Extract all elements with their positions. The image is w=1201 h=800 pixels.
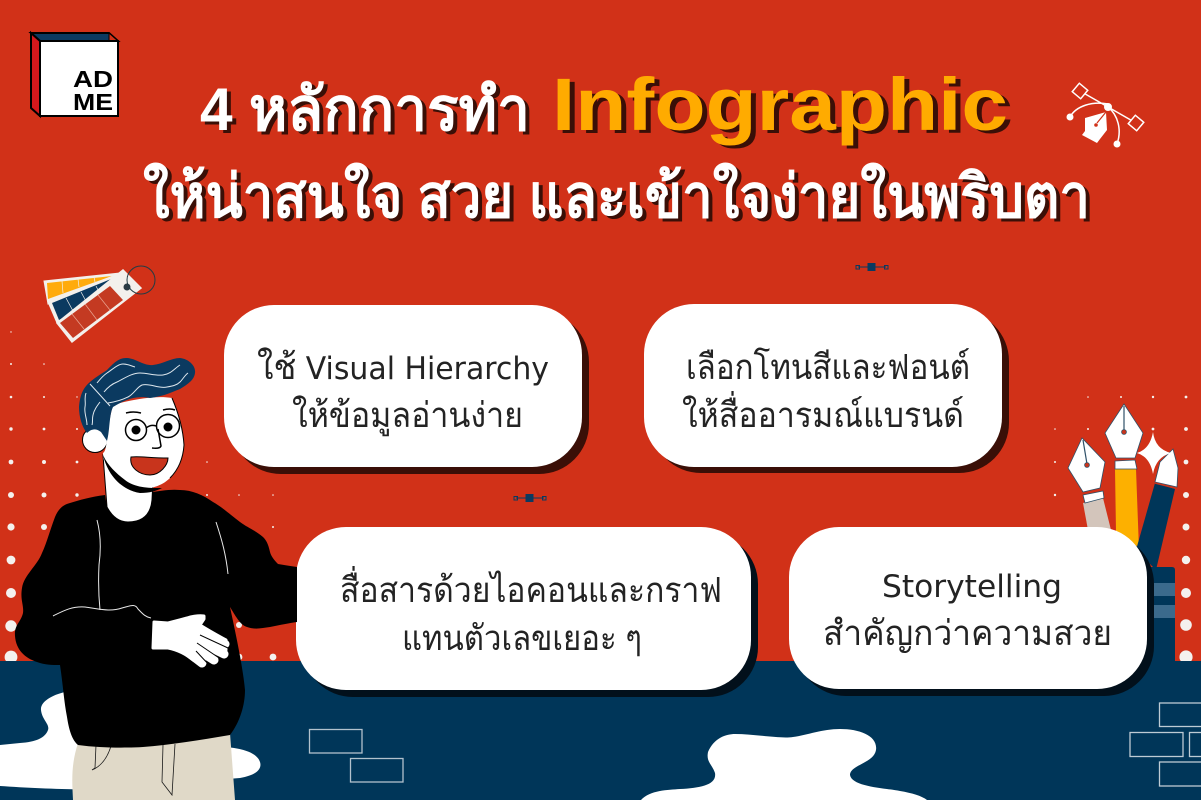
title line 1: thai: 4 หลักการทำ [200, 76, 530, 143]
title line 2: ให้น่าสนใจ สวย และเข้าใจง่ายในพริบตา [143, 162, 1090, 230]
icon: colour swatch fan [44, 266, 155, 342]
pen cup [1130, 567, 1175, 661]
pen: taupe [1068, 438, 1111, 530]
neck [103, 455, 153, 522]
ear [82, 428, 108, 452]
logo: ADME: AD [73, 66, 113, 92]
pen: navy [1136, 449, 1178, 570]
pen: yellow [1105, 404, 1143, 550]
swatch: navy [48, 275, 130, 323]
swatch: yellow [44, 273, 120, 304]
logo: ADME [31, 33, 118, 116]
glasses [126, 409, 180, 448]
small path node: top [856, 264, 888, 270]
small path node: middle [514, 494, 546, 502]
title line 1: thai: 4 หลักการทำ [204, 79, 534, 146]
face [103, 397, 184, 489]
card 3 text: สื่อสารด้วยไอคอนและกราฟ [340, 566, 722, 610]
card 3 text: แทนตัวเลขเยอะ ๆ [402, 619, 642, 658]
dot pattern: right [1054, 396, 1193, 664]
hair [79, 358, 195, 441]
icon: pen tool [1067, 83, 1144, 147]
card 2 text: ให้สื่ออารมณ์แบรนด์ [682, 391, 964, 435]
mouth [131, 457, 168, 475]
card 2 text: เลือกโทนสีและฟอนต์ [686, 347, 970, 387]
bricks: left [310, 730, 403, 782]
hand [153, 616, 228, 666]
card 2 text [682, 347, 970, 435]
logo: ADME: ME [73, 89, 113, 115]
sparkle star [1137, 432, 1171, 474]
dot pattern: left [5, 331, 276, 663]
card 1 [224, 305, 589, 474]
card 3 [296, 527, 758, 697]
title [143, 63, 1094, 233]
card 4 text [823, 569, 1112, 653]
card 3 text [340, 566, 722, 658]
card 1 text: ให้ข้อมูลอ่านง่าย [292, 395, 523, 436]
card 2 [644, 304, 1009, 473]
character [15, 358, 297, 800]
floor blob: centre [641, 729, 927, 800]
sweater [15, 490, 297, 748]
card 1 text: ใช้ Visual Hierarchy [257, 347, 549, 387]
card 4 [789, 527, 1154, 696]
swatch: red with tag [57, 270, 141, 342]
card 4 text: Storytelling [882, 569, 1062, 605]
floor blob: left [0, 691, 260, 789]
bricks: right [1130, 703, 1201, 786]
card 4 text: สำคัญกว่าความสวย [823, 614, 1112, 653]
beard line [103, 455, 162, 493]
card 1 text [257, 347, 549, 436]
title line 1: Infographic: Infographic [552, 63, 1008, 146]
title line 2: ให้น่าสนใจ สวย และเข้าใจง่ายในพริบตา [147, 165, 1094, 233]
trousers [72, 733, 235, 800]
floor [0, 661, 1201, 800]
title line 1: Infographic: Infographic [557, 66, 1013, 149]
swatch ring [127, 266, 155, 294]
